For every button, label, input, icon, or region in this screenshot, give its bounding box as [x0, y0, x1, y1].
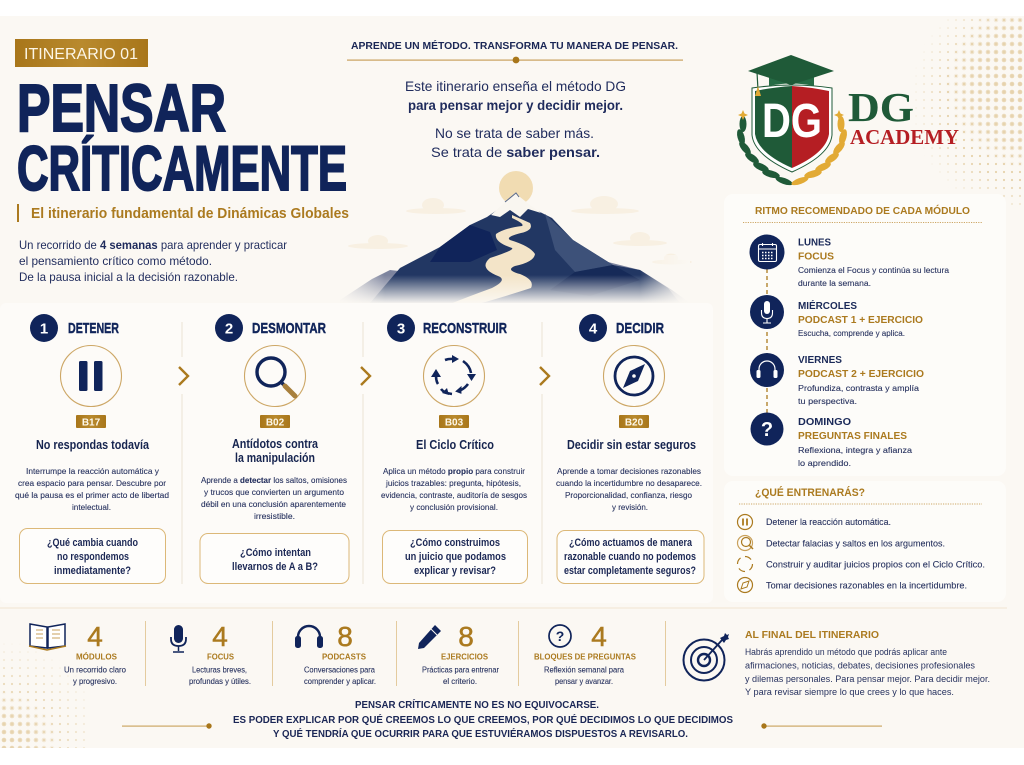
- icon: compass: [604, 346, 664, 406]
- illustration: mountain with path: [335, 171, 692, 305]
- text: miercoles: [798, 299, 923, 338]
- question box: inmediatamente?: [54, 565, 131, 577]
- badge b20: [619, 415, 649, 428]
- wordmark: DG: [848, 84, 914, 130]
- question box: razonable cuando no podemos: [564, 551, 696, 563]
- sparkles: [738, 110, 844, 120]
- badge b02: [260, 415, 290, 428]
- item: detener: [738, 514, 891, 530]
- intro paragraph: Un recorrido de 4 semanas para aprender y practicar: [19, 238, 287, 252]
- intro paragraph: [19, 238, 287, 284]
- central message: Este itinerario enseña el método DG: [405, 78, 626, 94]
- title: Decidir sin estar seguros: [567, 438, 696, 452]
- question box: ¿Cómo actuamos de manera: [569, 537, 692, 549]
- wordmark: ACADEMY: [850, 125, 959, 149]
- description: intelectual.: [72, 502, 111, 512]
- text: viernes: tu perspectiva.: [798, 396, 857, 406]
- description: débil en una conclusión aparentemente: [201, 499, 346, 509]
- laurel left: [736, 116, 793, 187]
- description: Proporcionalidad, confianza, riesgo: [565, 490, 692, 500]
- badge b17: [76, 415, 106, 428]
- description: [15, 466, 169, 512]
- icon: target with arrow: [684, 633, 729, 680]
- text: al final del itinerario: y dilemas personales. Para pensar mejor. Para decidir mejor.: [745, 674, 990, 684]
- text: viernes: PODCAST 2 + EJERCICIO: [798, 369, 924, 380]
- number 2: [215, 314, 243, 342]
- halftone dots top right: [915, 18, 1022, 205]
- text: viernes: Profundiza, contrasta y amplía: [798, 383, 919, 393]
- icon: microphone: [750, 295, 784, 329]
- number 1: [30, 314, 58, 342]
- stat: bloques de preguntas: pensar y avanzar.: [555, 677, 613, 686]
- number 3: 3: [397, 320, 405, 338]
- title: No respondas todavía: [36, 438, 150, 452]
- mountain body: [370, 202, 680, 303]
- icon: pause: [60, 346, 122, 406]
- step 3: reconstruir: [381, 314, 528, 584]
- halftone dots bottom left: [2, 651, 85, 748]
- icon: calendar: [750, 234, 784, 270]
- mountain far slopes: [340, 240, 690, 303]
- step 4: decidir: [556, 314, 704, 584]
- arrow: step 3 to 4: [540, 367, 549, 385]
- text: lunes: [798, 238, 949, 288]
- icon: question circle: ?: [556, 628, 564, 644]
- number 4: [579, 314, 607, 342]
- description: crea espacio para pensar. Descubre por: [18, 478, 166, 488]
- stat: modulos: y progresivo.: [73, 677, 117, 686]
- heading decidir: DECIDIR: [616, 320, 664, 337]
- question box: un juicio que podamos: [405, 551, 506, 563]
- icon: headphones: [750, 353, 784, 387]
- badge: itinerario 01: [15, 39, 148, 67]
- item: construir: [738, 556, 985, 572]
- text: miercoles: MIÉRCOLES: [798, 299, 857, 312]
- panel: ritmo recomendado: [724, 194, 1006, 476]
- number 3: [387, 314, 415, 342]
- stat: bloques de preguntas: BLOQUES DE PREGUNTAS: [534, 652, 636, 662]
- stat: focus: profundas y útiles.: [189, 677, 251, 686]
- title: Antídotos contra: [232, 437, 319, 451]
- description: Interrumpe la reacción automática y: [26, 466, 160, 476]
- item: detener: Detener la reacción automática.: [766, 517, 891, 527]
- stat: bloques de preguntas: [534, 621, 636, 686]
- text: domingo: Reflexiona, integra y afianza: [798, 445, 912, 455]
- question box: [200, 534, 349, 584]
- laurel right: [791, 116, 848, 187]
- description: [201, 475, 347, 521]
- shield initials: DG: [762, 95, 822, 148]
- badge b03: [439, 415, 469, 428]
- question box: no respondemos: [57, 551, 129, 563]
- stat: focus: Lecturas breves,: [192, 666, 247, 674]
- step 1: detener: [15, 314, 169, 584]
- text: viernes: VIERNES: [798, 355, 842, 366]
- stat: podcasts: PODCASTS: [322, 652, 366, 662]
- question box: ¿Cómo construimos: [410, 537, 500, 549]
- text: domingo: [798, 417, 912, 468]
- text: viernes: [798, 355, 924, 406]
- title: [232, 437, 319, 465]
- description: y revisión.: [612, 502, 648, 512]
- central message: [405, 78, 626, 160]
- text: lunes: durante la semana.: [798, 278, 871, 288]
- stat: focus: 4: [212, 621, 228, 652]
- stat: modulos: Un recorrido claro: [64, 666, 127, 674]
- tagline with rule: APRENDE UN MÉTODO. TRANSFORMA TU MANERA DE PENSAR.: [351, 39, 678, 52]
- item: construir: Construir y auditar juicios propios con el Ciclo Crítico.: [766, 560, 985, 570]
- text: al final del itinerario: AL FINAL DEL ITINERARIO: [745, 630, 879, 641]
- stat: focus: [171, 621, 251, 686]
- text: miercoles: PODCAST 1 + EJERCICIO: [798, 315, 923, 326]
- question box: llevarnos de A a B?: [232, 561, 318, 573]
- arrow: step 2 to 3: [361, 367, 370, 385]
- intro paragraph: el pensamiento crítico como método.: [19, 254, 212, 268]
- heading: entrenaras: ¿QUÉ ENTRENARÁS?: [755, 486, 865, 499]
- description: [381, 466, 527, 512]
- icon: headphones: [295, 626, 323, 648]
- number 2: 2: [225, 320, 233, 338]
- stat: bloques de preguntas: 4: [591, 621, 607, 652]
- stat strip: [29, 621, 990, 697]
- text: lunes: LUNES: [798, 238, 831, 248]
- text: lunes: FOCUS: [798, 252, 834, 262]
- subtitle: El itinerario fundamental de Dinámicas Globales: [31, 206, 349, 222]
- item: detectar: Detectar falacias y saltos en los argumentos.: [766, 538, 945, 548]
- closing statement: PENSAR CRÍTICAMENTE NO ES NO EQUIVOCARSE.: [355, 698, 599, 711]
- badge b17: B17: [82, 418, 101, 428]
- title: CRÍTICAMENTE: [17, 134, 347, 204]
- badge: itinerario 01: ITINERARIO 01: [24, 46, 138, 63]
- text: domingo: lo aprendido.: [798, 458, 851, 468]
- description: Aprende a detectar los saltos, omisiones: [201, 475, 347, 485]
- badge b03: B03: [445, 418, 464, 428]
- stat: modulos: [29, 621, 127, 686]
- stat: ejercicios: EJERCICIOS: [441, 652, 488, 662]
- mountain shadows: [430, 225, 497, 262]
- accent line right: [761, 723, 882, 729]
- question box: [557, 530, 704, 584]
- step dividers: [182, 322, 542, 584]
- description: y trucos que convierten un argumento: [204, 487, 344, 497]
- description: evidencia, contraste, auditoría de sesgos: [381, 490, 527, 500]
- stat: bloques de preguntas: Reflexión semanal para: [544, 666, 625, 674]
- question box: ¿Qué cambia cuando: [47, 537, 138, 549]
- closing statement: Y QUÉ TENDRÍA QUE OCURRIR PARA QUE ESTUVIÉRAMOS DISPUESTOS A REVISARLO.: [273, 727, 688, 740]
- question box: explicar y revisar?: [414, 565, 496, 577]
- title: PENSAR: [17, 71, 226, 146]
- accent line left: [122, 723, 212, 729]
- text: al final del itinerario: [745, 630, 990, 697]
- icon: cycle arrows: [424, 346, 484, 406]
- central message: Se trata de saber pensar.: [431, 144, 600, 160]
- stat: podcasts: 8: [337, 621, 353, 652]
- intro paragraph: De la pausa inicial a la decisión razonable.: [19, 270, 238, 284]
- stat: podcasts: comprender y aplicar.: [304, 677, 376, 686]
- bottom section rule: [0, 607, 1007, 609]
- description: y conclusión provisional.: [410, 502, 498, 512]
- header block: [15, 39, 349, 284]
- wordmark: [848, 84, 959, 149]
- logo: DG Academy: [736, 55, 959, 187]
- number 1: 1: [40, 320, 48, 338]
- description: irresistible.: [254, 511, 295, 521]
- snow cap: [491, 193, 541, 217]
- text: domingo: DOMINGO: [798, 417, 851, 428]
- badge b20: B20: [625, 418, 644, 428]
- icon: open book: [29, 624, 66, 650]
- step 2: desmontar: [200, 314, 349, 584]
- text: al final del itinerario: afirmaciones, noticias, debates, decisiones profesionales: [745, 660, 975, 670]
- closing statement: ES PODER EXPLICAR POR QUÉ CREEMOS LO QUE CREEMOS, POR QUÉ DECIDIMOS LO QUE DECIDIMOS: [233, 713, 733, 726]
- stat: modulos: MÓDULOS: [76, 650, 117, 662]
- text: miercoles: Escucha, comprende y aplica.: [798, 328, 905, 338]
- question box: estar completamente seguros?: [564, 565, 696, 577]
- stat: podcasts: Conversaciones para: [304, 666, 376, 674]
- central message: para pensar mejor y decidir mejor.: [408, 98, 623, 113]
- tagline with rule: [347, 39, 683, 63]
- item: detectar: [738, 536, 945, 550]
- stat: modulos: 4: [87, 621, 103, 652]
- clouds: [348, 196, 692, 264]
- heading desmontar: DESMONTAR: [252, 320, 326, 337]
- description: [556, 466, 702, 512]
- graduation cap: [769, 72, 814, 86]
- description: qué la pausa es el primer acto de libertad: [15, 490, 169, 500]
- title: El Ciclo Crítico: [416, 438, 494, 452]
- question box: ¿Cómo intentan: [240, 547, 311, 559]
- text: al final del itinerario: Y para revisar siempre lo que crees y lo que haces.: [745, 687, 954, 697]
- description: cuando la incertidumbre no desaparece.: [556, 478, 702, 488]
- question box: [20, 528, 166, 584]
- number 4: 4: [589, 320, 598, 338]
- description: juicios trazables: pregunta, hipótesis,: [385, 478, 521, 488]
- stat: ejercicios: el criterio.: [443, 677, 477, 686]
- panel: que entrenaras: [724, 481, 1006, 602]
- central message: No se trata de saber más.: [435, 125, 594, 141]
- item: tomar: Tomar decisiones razonables en la incertidumbre.: [766, 580, 967, 590]
- badge b02: B02: [266, 418, 285, 428]
- shield: [752, 85, 832, 172]
- title: [18, 83, 346, 192]
- arrow: step 1 to 2: [179, 367, 188, 385]
- heading reconstruir: RECONSTRUIR: [423, 320, 507, 337]
- text: domingo: PREGUNTAS FINALES: [798, 431, 907, 442]
- question box: [382, 530, 528, 584]
- item: tomar: [738, 578, 967, 592]
- bottom fade: [335, 275, 690, 304]
- icon: question: [750, 412, 784, 446]
- description: Aprende a tomar decisiones razonables: [557, 466, 701, 476]
- icon: question: ?: [761, 419, 773, 441]
- stat: ejercicios: 8: [458, 621, 474, 652]
- stat: ejercicios: Prácticas para entrenar: [422, 666, 499, 674]
- heading detener: DETENER: [68, 320, 119, 337]
- title: la manipulación: [235, 451, 315, 465]
- icon: pencil: [418, 625, 441, 649]
- closing statement: [233, 698, 733, 740]
- stat: focus: FOCUS: [207, 652, 234, 662]
- winding road: [450, 215, 535, 304]
- panel: four steps: [0, 303, 713, 603]
- stat: ejercicios: [418, 621, 499, 686]
- text: lunes: Comienza el Focus y continúa su lectura: [798, 265, 949, 275]
- text: al final del itinerario: Habrás aprendido un método que podrás aplicar ante: [745, 647, 947, 657]
- stat: podcasts: [295, 621, 376, 686]
- icon: microphone: [171, 625, 186, 652]
- icon: magnifier: [244, 346, 306, 406]
- heading: ritmo: RITMO RECOMENDADO DE CADA MÓDULO: [755, 204, 970, 217]
- description: Aplica un método propio para construir: [383, 466, 525, 476]
- sun: [499, 171, 533, 205]
